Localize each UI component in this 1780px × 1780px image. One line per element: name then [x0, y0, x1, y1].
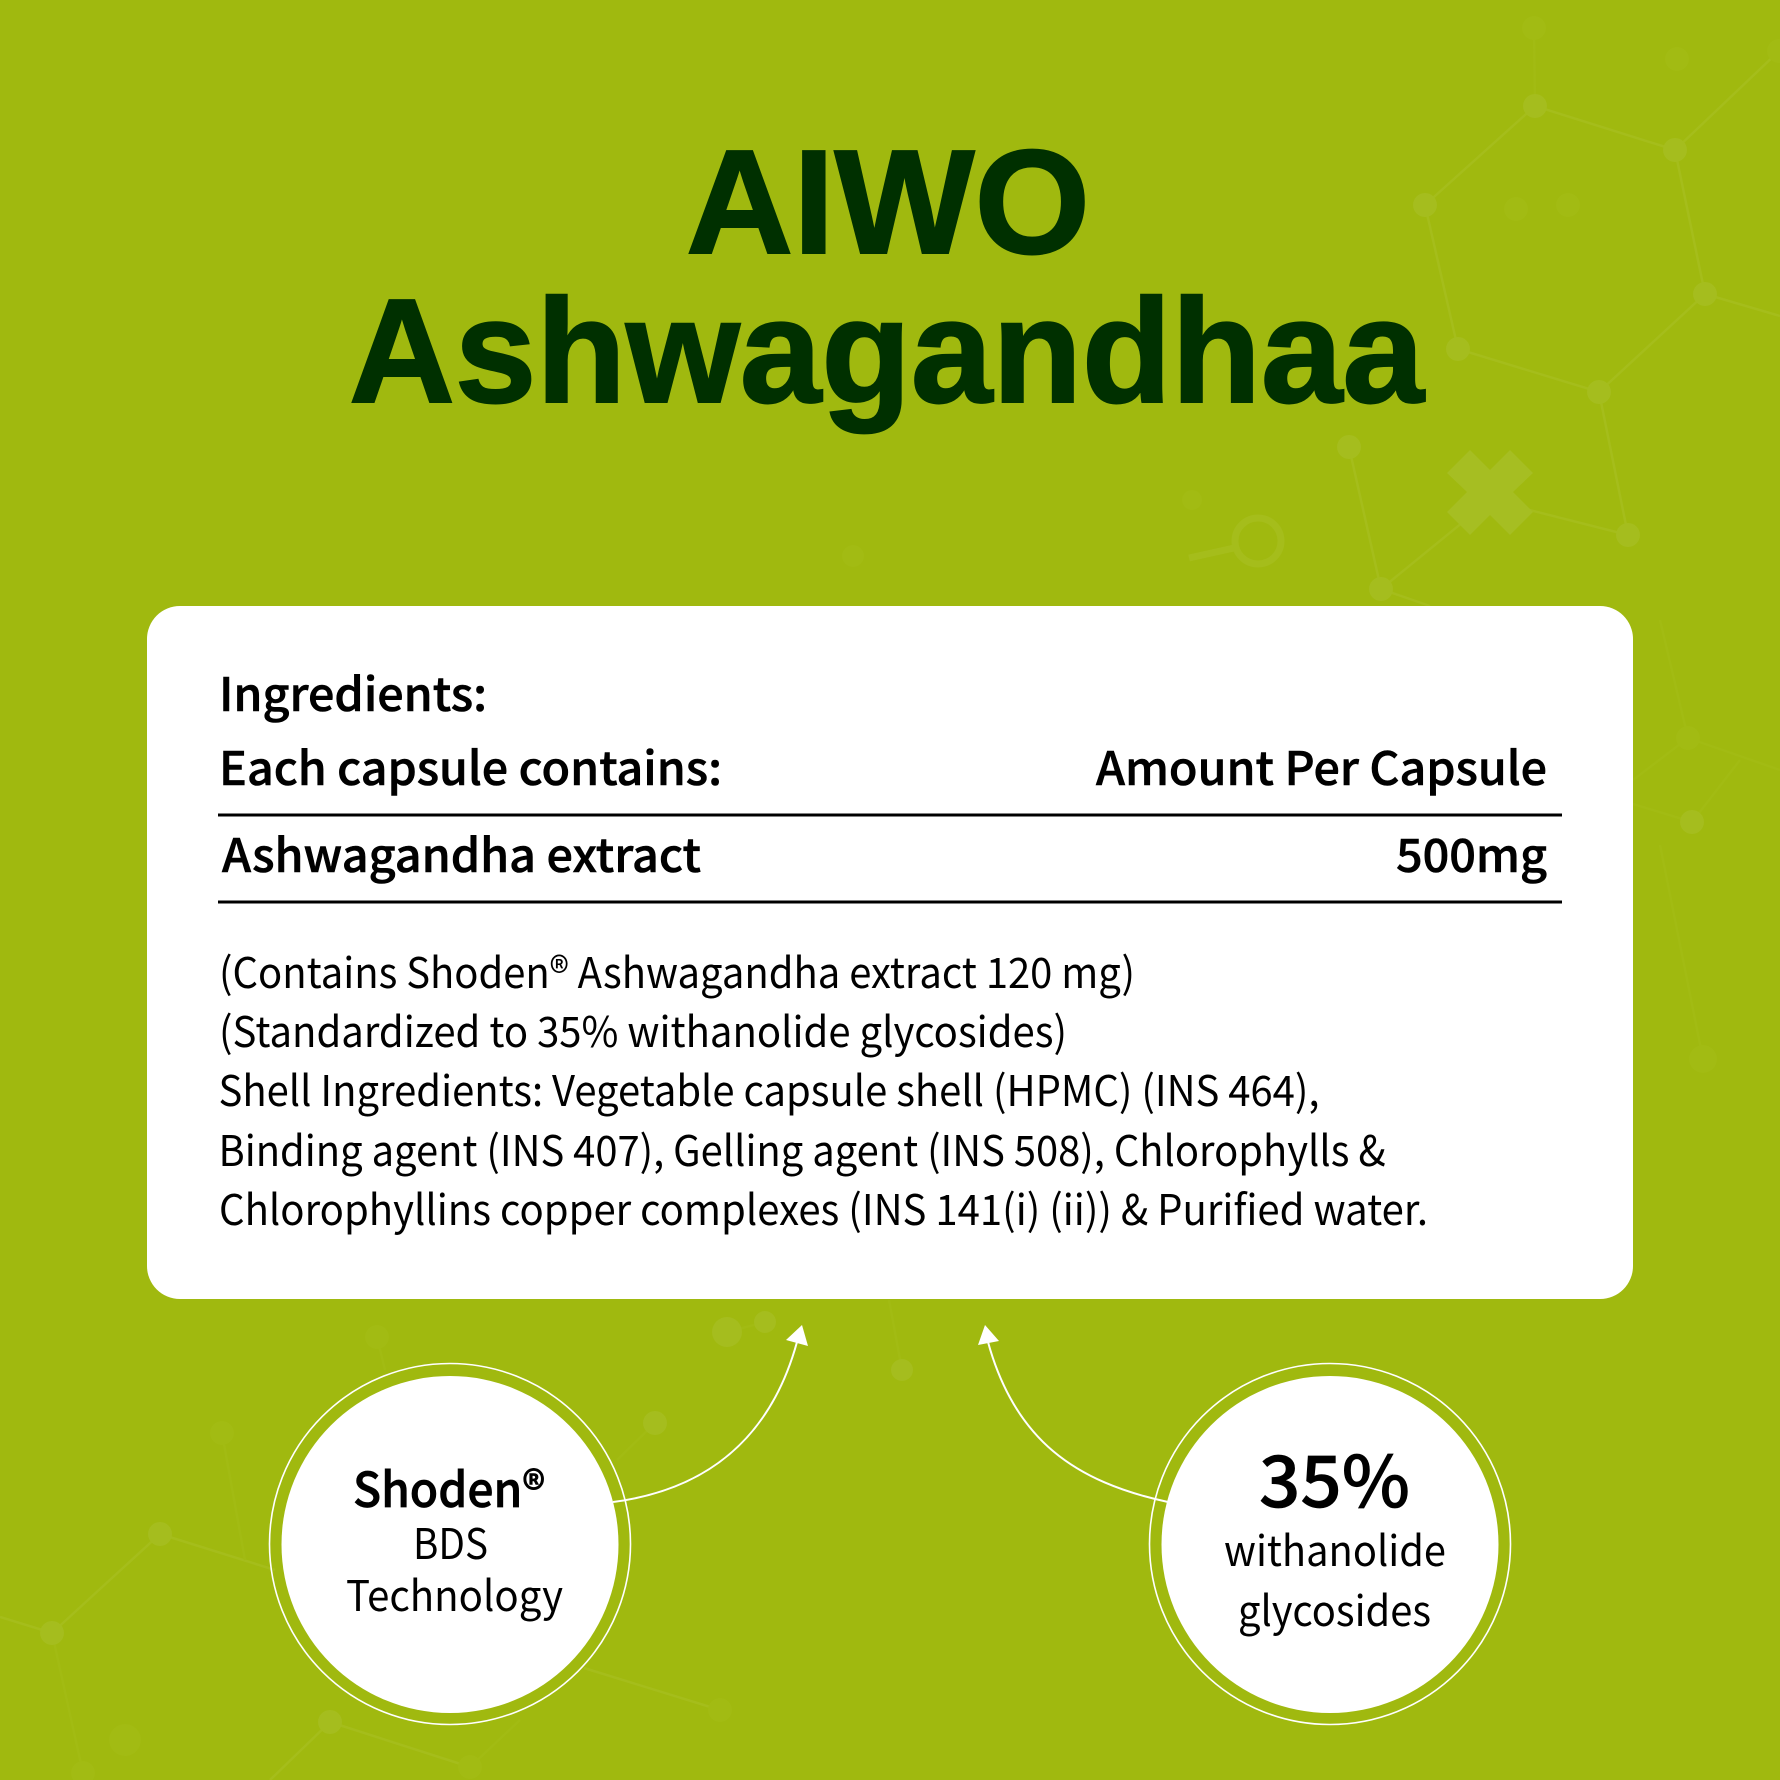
table row: 500mg: 500mg — [1396, 820, 1547, 886]
table header: each capsule contains: Each capsule contains: — [219, 733, 722, 799]
arrow: right callout to card — [978, 1325, 1168, 1502]
callout: Shoden BDS Technology: Shoden® — [353, 1451, 545, 1521]
callout: Shoden BDS Technology: Technology — [346, 1563, 563, 1624]
title: Ashwagandhaa — [349, 269, 1426, 434]
callout: Shoden BDS Technology — [270, 1364, 630, 1724]
text block: composition notes: (Contains Shoden® Ashwagandha extract 120 mg) — [219, 940, 1135, 1001]
table header: amount per capsule: Amount Per Capsule — [1096, 733, 1547, 799]
text block: composition notes — [218, 940, 1428, 1238]
callout: 35% withanolide glycosides — [1150, 1364, 1510, 1724]
panel: ingredients card — [147, 606, 1633, 1299]
callout: 35% withanolide glycosides: 35% — [1259, 1426, 1410, 1528]
callout: 35% withanolide glycosides: glycosides — [1238, 1578, 1431, 1639]
arrow: left callout to card — [613, 1325, 808, 1502]
heading: ingredients: Ingredients: — [219, 659, 487, 725]
title: AIWO — [686, 120, 1090, 285]
icon: background magnifier — [1189, 518, 1281, 564]
text block: composition notes: Shell Ingredients: Vegetable capsule shell (HPMC) (INS 464), — [218, 1058, 1320, 1119]
icon: background cross — [1447, 450, 1533, 535]
title — [349, 120, 1426, 434]
text block: composition notes: (Standardized to 35% withanolide glycosides) — [219, 999, 1067, 1060]
callout: 35% withanolide glycosides: withanolide — [1224, 1518, 1446, 1579]
text block: composition notes: Binding agent (INS 407), Gelling agent (INS 508), Chlorophylls & — [218, 1118, 1386, 1179]
text block: composition notes: Chlorophyllins copper complexes (INS 141(i) (ii)) & Purified water. — [219, 1177, 1428, 1238]
table row: ashwagandha extract: Ashwagandha extract — [222, 820, 701, 886]
callout: Shoden BDS Technology: BDS — [413, 1511, 488, 1572]
